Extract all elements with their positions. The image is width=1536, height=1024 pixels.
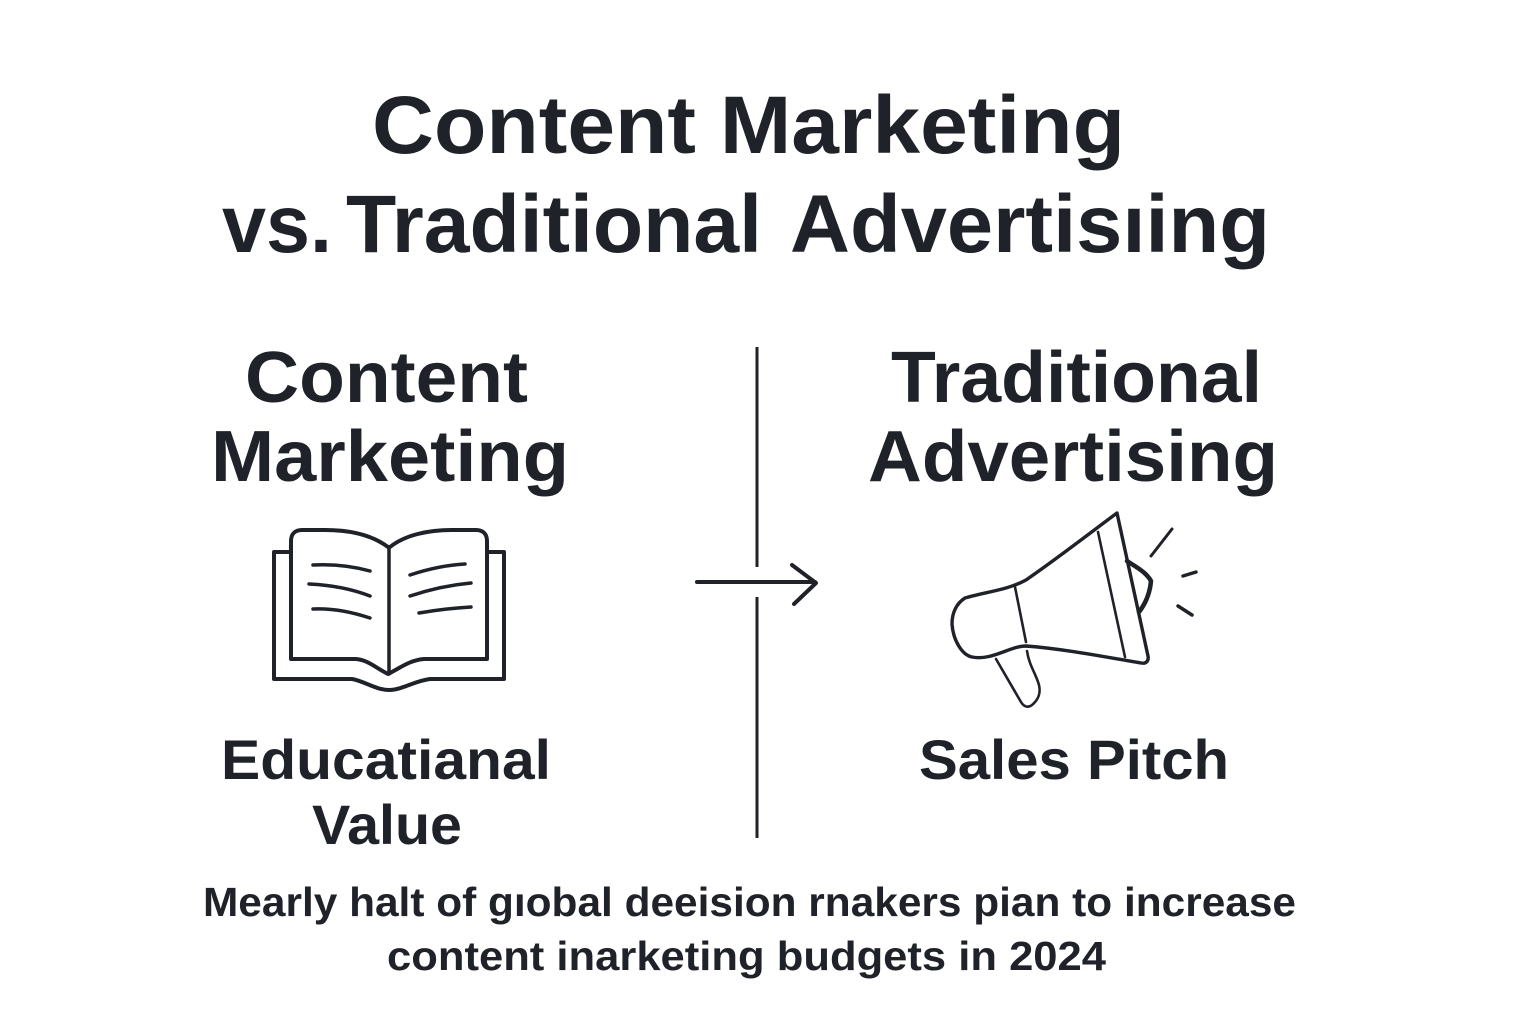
label: sales pitch: Sales Pitch [919,728,1229,791]
heading: traditional advertising [868,338,1278,497]
panel: traditional advertising [868,338,1278,791]
label: educational value [221,728,551,856]
footer statistic [203,879,1296,979]
title: Content Marketing [372,80,1125,171]
divider line [756,347,758,838]
heading: content marketing [211,338,569,497]
footer statistic: Mearly halt of gıobal deeision rnakers pian to increase [203,879,1296,925]
footer statistic: content inarketing budgets in 2024 [387,933,1106,979]
heading: content marketing: Marketing [211,417,569,497]
panel: content marketing [211,338,569,856]
title: Advertisıing [790,179,1270,270]
label: educational value: Educatianal [221,728,551,791]
heading: content marketing: Content [245,338,528,418]
heading: traditional advertising: Advertising [868,417,1278,497]
title: vs. [222,179,332,270]
title: Traditional [346,179,762,270]
label: educational value: Value [312,793,462,856]
icon: open book [274,530,504,690]
heading: traditional advertising: Traditional [891,338,1262,418]
arrow [697,565,816,604]
icon: megaphone [952,513,1196,707]
title [222,80,1270,270]
